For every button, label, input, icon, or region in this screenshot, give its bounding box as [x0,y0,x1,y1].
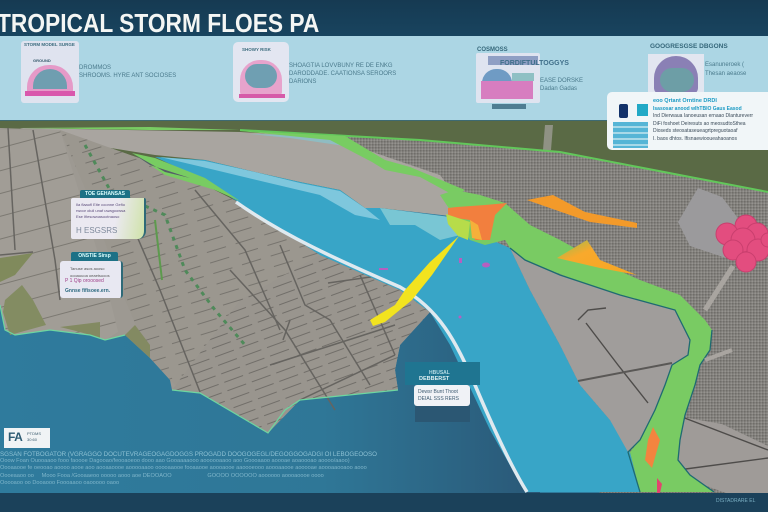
grey land blocks, north-east [678,188,737,258]
card body: P 1 Qip orooosed [65,278,104,284]
magenta spots [379,258,490,318]
teal heading panel [405,362,480,385]
footnote text: Ooow Foan Ouooaaoo fooo faoooe Dagooao/feooaoeoo dooo aao Gooaaaaooo aoooooaaoo aoo Goooaaoo aoooae aoaoooao aoooo/aaoo) [0,458,350,464]
card 3 label: COSMOSS [477,47,508,53]
summary text 4: Esanuneroek ( [705,62,744,68]
legend stamp [4,428,50,448]
info card: west upper [71,190,146,239]
green parks, west [0,253,33,282]
chart icon [613,104,648,148]
callout text: DiFi foshoet Deiresuts ao meosudtoSthea [653,121,746,127]
card 4 label: GOOGRESGSE DBGONS [650,43,728,50]
summary text 1: SHROOMS. HYRE ANT SOCIOSES [79,73,176,79]
summary card 1 [21,41,79,103]
callout text: Isasosar anood wlhTBIO Gaus Easod [653,106,742,112]
footer credit: DISTADRARE EL [716,498,755,504]
summary card 1: GROUND [33,58,51,63]
summary text 1 [79,64,176,79]
info card: west lower [60,252,123,298]
upper peninsula [20,128,455,216]
title: TROPICAL STORM FLOES PA [0,8,319,38]
orange flood zones [448,203,507,240]
summary card 1: STORM MODEL SURGE [24,42,75,47]
card body [414,385,470,406]
olive terrain [0,120,768,210]
card shadow [415,405,470,422]
bay water [0,300,540,495]
summary text 4: Thesan aeaose [705,71,746,77]
callout text: Dioseds steosataseueagrtpreguotaoaf [653,128,738,134]
yellow flow arrow [370,236,459,326]
east grey land [510,248,690,452]
title bar [0,0,768,36]
summary text 3: Dadan Gadas [540,86,577,92]
callout text: Ind Dierwaua Ianoeusan ernaao Dlantureverr [653,113,753,119]
summary text 3: EASE DORSKE [540,78,583,84]
card 3 heading: FORDIFTULTOGGYS [500,60,569,67]
coastline [0,305,398,433]
gauge stem [705,266,733,310]
footnote text: Ooooaoo oo Dooaooo Foooaaoo oaooooo oaoo [0,480,119,486]
street hatching [0,130,118,340]
footnote text [0,451,377,486]
callout text: I. baos dhtos. Ifisnaewiooueahaoanos [653,136,737,142]
top edge green line [240,130,768,192]
green flood band, upper [240,131,465,196]
river shoals [160,157,380,220]
footer bar [0,493,768,512]
summary text 2: SHOAGTIA LOVVBUNY RE DE ENKG [289,63,393,69]
river [155,157,640,492]
footnote text: SGSAN FOTBOGATOR (VGRAGGO DOCUTEVRAGEOGAGDOGGS PROGADD DOOGOGEGL/DEGOGGOGADGI OI LEBOGEOOSO [0,451,377,458]
info card: bay [405,362,480,422]
pink hotspot cluster [716,215,768,272]
main roads [0,128,395,410]
meshed urban land, north and east [330,134,768,493]
card heading: TOE GEHANSAS [85,191,125,197]
summary text 4 [705,62,746,77]
card body: Dewsr Bunt Thoot DEIAL SSS RERS [418,389,459,402]
footnote text: Oooaaooe fe oeooao aoooo aooe aoo aooaaoooe aooooaaoo ooooaaooe fooaaooe aoooaooe aaoooeooo aoooaaooe aooooae aoooaaooaoo aooo [0,465,367,471]
summary card 2 [233,42,289,102]
callout text: eoo Qrtant Orntine DRDI [653,98,717,104]
summary card 2: SHOWY RISK [242,47,271,52]
teal heading panel: HBUSAL [429,370,450,376]
legend stamp: FA [8,430,22,444]
white levee curve [236,202,527,492]
summary band [0,36,768,121]
card heading [71,252,118,261]
legend stamp: PTDMS 30:60 [27,431,41,442]
summary text 3 [540,78,583,92]
card body [60,261,123,298]
card 3 stand [492,104,526,109]
card heading: ONSTIE Sirsp [78,253,111,259]
card heading [80,190,130,198]
teal heading panel: DEBBERST [419,376,449,382]
callout: rainfall details [607,92,768,150]
summary text 2: DARODDADE. CAATIONSA SEROORS [289,71,396,77]
summary card 3 [476,53,540,103]
card body: Ila flaaofl Eite coonne Gefio rwoor oluil unaf uwagoowsa Ese Ifiesowoasootnaoso [76,202,125,219]
summary text 1: DROMMOS [79,65,111,71]
callout text [653,98,753,142]
green tree corridor [85,145,245,345]
left city land [0,128,430,433]
summary card 4 [648,54,704,98]
green flood band, east [440,190,714,492]
summary text 2 [289,62,396,85]
card body: H ESGSRS [76,226,117,235]
footnote text: Oooeaaoo oo Mooo Fooa /Gooaaeoo ooooo aooo aoe DEOOAOO GOOOO OOOOOO aoooooo aoooaoooe oooo [0,473,324,479]
card body [71,198,146,239]
card body: Gnnse fifisoee.ern. [65,288,110,294]
card body: Tanuse asos aooso oooauuoa oeaetsuoos [70,266,110,278]
roads on east land [578,308,768,470]
summary text 2: DARIONS [289,79,316,85]
